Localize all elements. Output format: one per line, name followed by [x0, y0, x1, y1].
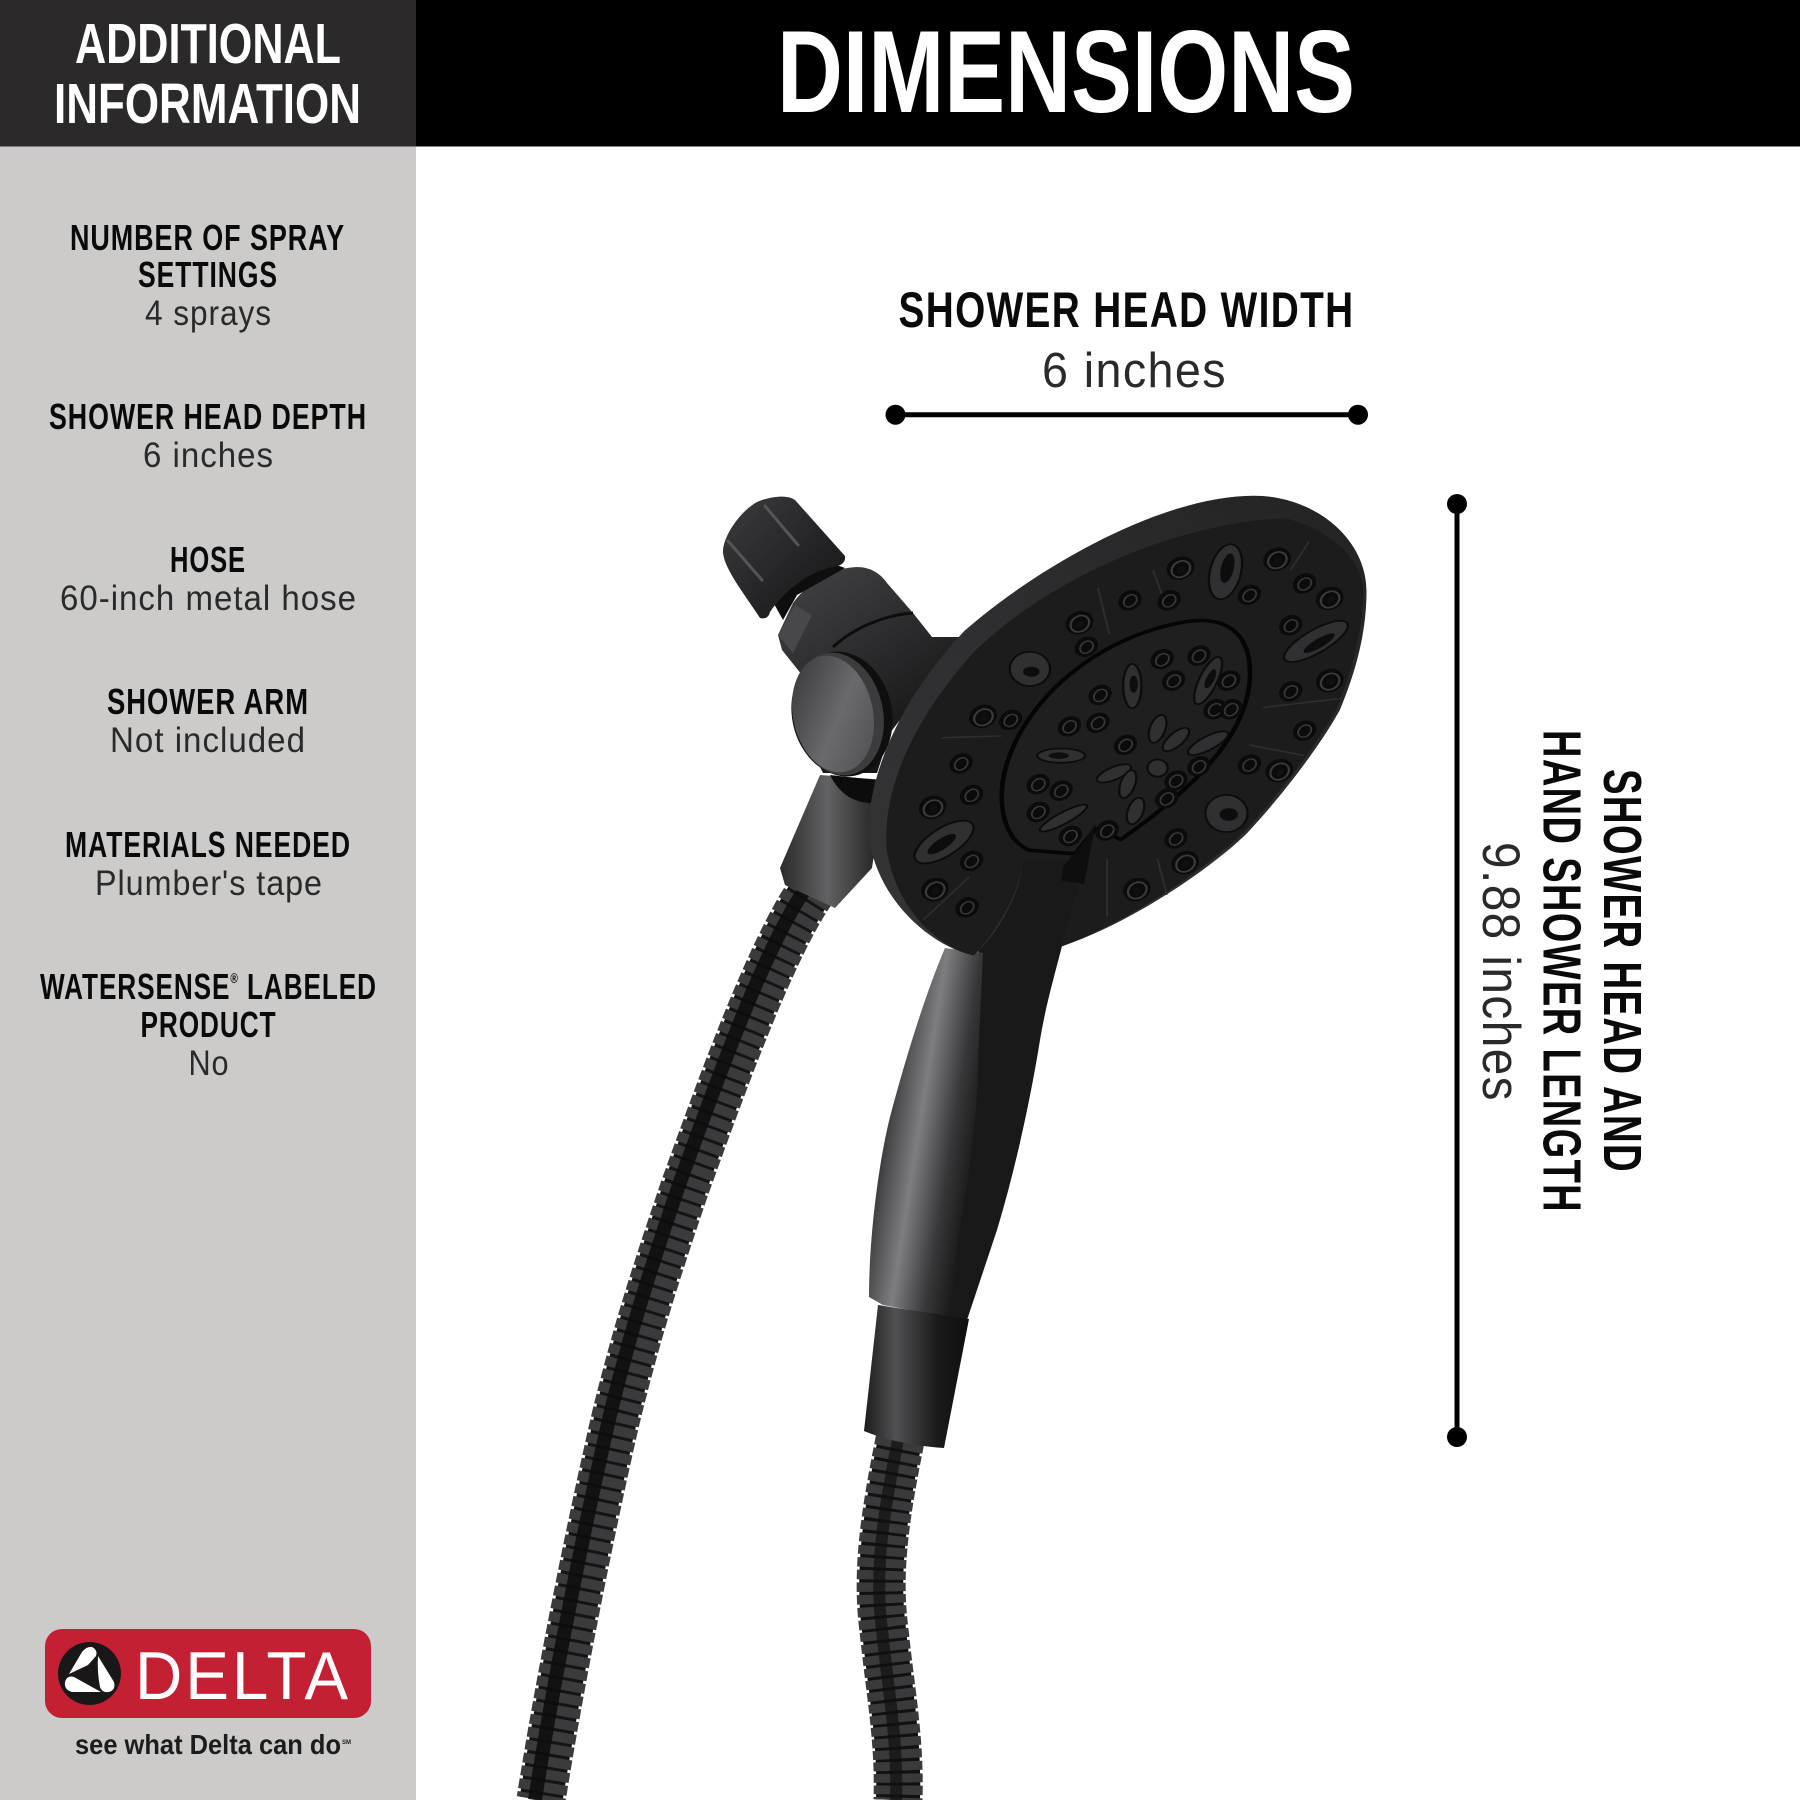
callout: shower head width: SHOWER HEAD WIDTH: [898, 282, 1354, 338]
header: additional information: [0, 0, 416, 146]
spec: number of spray settings: 4 sprays: [145, 294, 272, 333]
swivel disc face: [782, 648, 884, 780]
upper hose: [535, 888, 812, 1800]
callout: shower head and hand shower length: [1447, 494, 1652, 1447]
teardrop nozzle openings: [924, 553, 1338, 857]
hose collar: [864, 1305, 969, 1448]
spec: shower arm: SHOWER ARM: [107, 681, 309, 722]
delta logo: SM: [342, 1740, 351, 1746]
inner nozzles: [1022, 642, 1247, 849]
sidebar panel background: [0, 146, 416, 1800]
spec: watersense labeled product: [40, 966, 377, 1083]
o-ring: [830, 775, 875, 803]
spec: materials needed: Plumber's tape: [95, 864, 323, 903]
spec: watersense labeled product: ®: [230, 970, 239, 986]
callout: shower head width: [886, 282, 1368, 425]
handle light face: [869, 948, 983, 1318]
outer nozzles: [913, 544, 1349, 921]
header: additional information: ADDITIONAL: [75, 12, 341, 76]
shower head: [868, 496, 1367, 956]
callout: shower head and hand shower length: 9.88 inches: [1471, 842, 1530, 1102]
mount arm: [780, 775, 885, 908]
spray selector lever: [1061, 823, 1096, 884]
spec: number of spray settings: NUMBER OF SPRAY: [70, 217, 345, 258]
spec: number of spray settings: SETTINGS: [138, 254, 278, 295]
swivel body: [778, 567, 965, 773]
header: additional information: INFORMATION: [54, 72, 361, 136]
connector knob: [723, 497, 845, 618]
spec: shower arm: Not included: [110, 721, 306, 760]
length dimension line: [1447, 494, 1467, 1447]
sidebar spec list: [40, 217, 377, 1083]
spec: hose: HOSE: [170, 539, 246, 580]
spec: watersense labeled product: LABELED: [239, 966, 377, 1007]
spec: hose: [60, 539, 357, 618]
delta logo: [45, 1629, 371, 1760]
spec: shower head depth: SHOWER HEAD DEPTH: [49, 396, 367, 437]
wall mount bracket: [723, 497, 965, 908]
body seam: [833, 613, 913, 647]
head rim: [868, 496, 1367, 956]
width dimension line: [886, 405, 1368, 425]
lower hose: [879, 1440, 900, 1800]
callout: shower head and hand shower length: HAND SHOWER LENGTH: [1532, 730, 1592, 1213]
large teardrop nozzles: [906, 542, 1355, 871]
icon: delta emblem: [58, 1642, 121, 1705]
spec: shower head depth: [49, 396, 367, 475]
face radial ridges: [923, 541, 1341, 920]
spec: number of spray settings: [70, 217, 345, 333]
callout: shower head width: 6 inches: [1042, 344, 1227, 398]
hand shower handle: [869, 850, 1096, 1320]
header: dimensions title: [416, 0, 1800, 146]
connector neck: [768, 564, 845, 620]
spec: shower head depth: 6 inches: [143, 436, 274, 475]
swivel disc ring: [780, 642, 904, 786]
spec: materials needed: [65, 824, 351, 903]
header: dimensions title: DIMENSIONS: [777, 6, 1355, 137]
delta logo: see what Delta can do: [75, 1729, 341, 1760]
spec: shower arm: [107, 681, 309, 760]
product illustration: hand shower with hose: [535, 496, 1367, 1800]
inner spray disc: [1002, 620, 1250, 854]
delta logo: DELTA: [135, 1638, 351, 1714]
spec: watersense labeled product: No: [188, 1044, 230, 1083]
spec: hose: 60-inch metal hose: [60, 579, 357, 618]
spec: materials needed: MATERIALS NEEDED: [65, 824, 351, 865]
spec: watersense labeled product: PRODUCT: [140, 1004, 276, 1045]
hex nut: [778, 605, 812, 653]
handle dark spine and neck: [940, 850, 1096, 1320]
head face: [886, 518, 1363, 956]
callout: shower head and hand shower length: SHOWER HEAD AND: [1592, 769, 1652, 1173]
spec: watersense labeled product: WATERSENSE: [40, 966, 302, 1007]
